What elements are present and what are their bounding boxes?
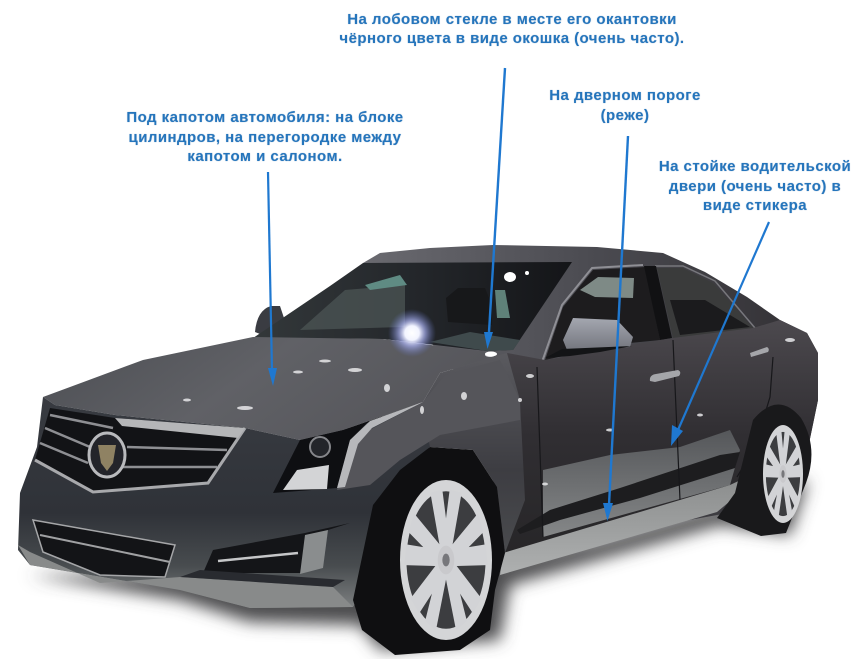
side body panel — [490, 320, 818, 553]
ground shadow — [28, 480, 808, 650]
text: driver door pillar: виде стикера — [703, 197, 807, 214]
lip shade — [180, 570, 345, 587]
windshield — [253, 262, 572, 351]
text: under the hood: Под капотом автомобиля: на блоке — [126, 109, 404, 126]
car body — [18, 245, 818, 608]
windshield sparkles — [485, 271, 529, 356]
side window front — [545, 267, 660, 360]
side mirror — [545, 318, 633, 358]
front bumper — [18, 397, 430, 608]
rear wheel — [717, 404, 811, 536]
side reflection — [543, 430, 740, 537]
lower intake — [33, 520, 175, 577]
fog lamp intake — [203, 523, 350, 574]
arrow: hood — [268, 172, 277, 386]
headlight — [273, 402, 423, 493]
door lines — [537, 340, 773, 537]
b-pillar — [644, 266, 672, 340]
text: windshield: чёрного цвета в виде окошка (очень часто). — [339, 30, 685, 47]
window reflection — [580, 277, 634, 298]
arrow: door pillar — [671, 222, 769, 446]
arrow: door sill — [603, 136, 628, 521]
text: windshield: На лобовом стекле в месте его окантовки — [347, 11, 677, 28]
text: door sill — [549, 87, 701, 124]
roof and rear body — [363, 245, 818, 553]
grille — [35, 408, 245, 492]
rear window dark corner — [670, 300, 750, 335]
text: door sill: (реже) — [601, 107, 649, 124]
text: under the hood — [126, 109, 404, 165]
black streak — [517, 452, 740, 534]
fender — [340, 353, 525, 587]
hood — [43, 337, 513, 440]
text: driver door pillar: двери (очень часто) в — [669, 178, 841, 194]
windshield interior — [300, 275, 520, 351]
text: driver door pillar: На стойке водительской — [659, 158, 851, 175]
sill — [500, 477, 747, 575]
door handles — [650, 347, 769, 382]
far-side mirror — [255, 306, 286, 338]
window trim — [542, 265, 643, 362]
emblem — [89, 433, 125, 477]
text: under the hood: капотом и салоном. — [187, 148, 343, 165]
fender shoulder highlight — [337, 360, 520, 490]
paint sparkles — [183, 338, 795, 486]
side window rear — [657, 268, 753, 338]
arrow: windshield — [484, 68, 505, 349]
text: driver door pillar — [659, 158, 851, 214]
front wheel — [353, 447, 505, 655]
text: windshield — [339, 11, 685, 47]
text: door sill: На дверном пороге — [549, 87, 701, 104]
windshield light flare — [388, 309, 436, 357]
lower lip — [18, 545, 353, 608]
text: under the hood: цилиндров, на перегородке между — [129, 128, 401, 146]
rear window trim — [655, 266, 755, 328]
